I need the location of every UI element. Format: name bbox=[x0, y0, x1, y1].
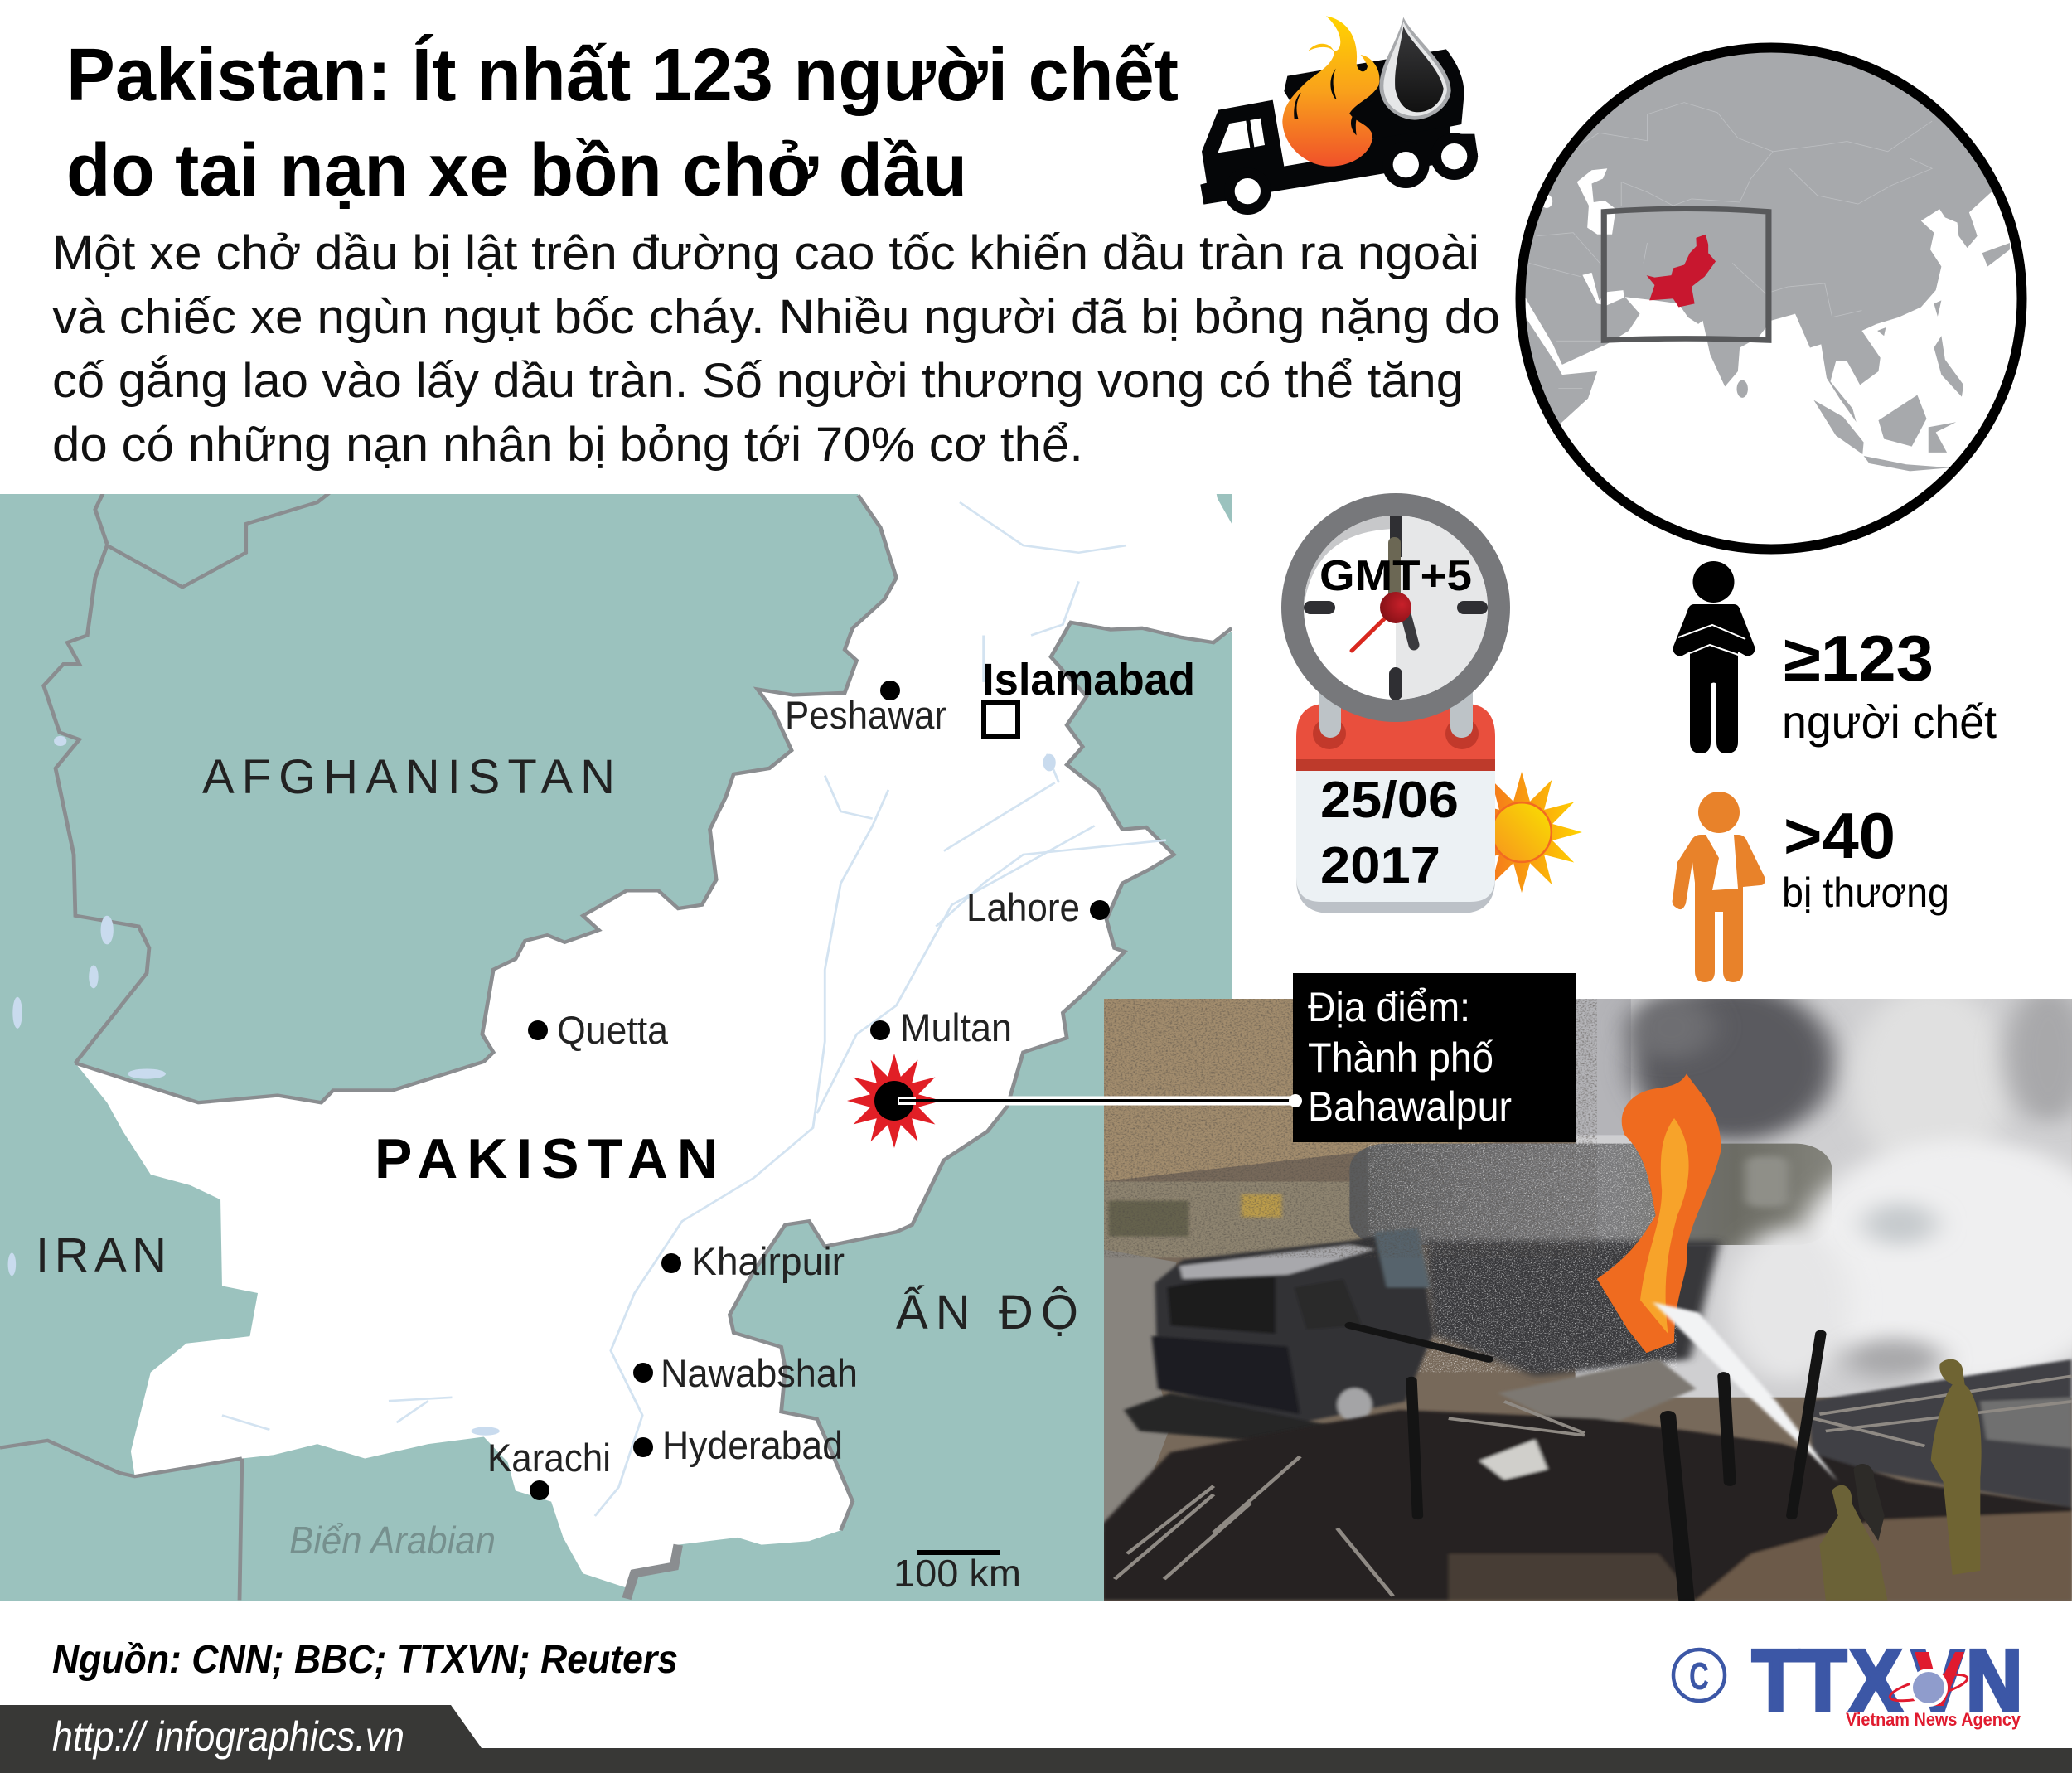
icon: person injured bbox=[1673, 792, 1765, 982]
calendar bbox=[1296, 680, 1495, 913]
sea label: Biển Arabian bbox=[289, 1519, 496, 1562]
scale bar: 100 km bbox=[893, 1552, 1021, 1595]
map panel bbox=[0, 481, 1237, 1601]
stat: injured bbox=[1782, 799, 1949, 916]
city: Islamabad capital bbox=[982, 655, 1195, 737]
footer bar bbox=[0, 1705, 2072, 1773]
copyright mark bbox=[1673, 1649, 1725, 1701]
website url: http:// infographics.vn bbox=[52, 1713, 404, 1760]
inset photo: burnt tanker fire bbox=[1102, 985, 2072, 1605]
Pakistan and northern territory land bbox=[75, 481, 1237, 1588]
rivers bbox=[222, 502, 1166, 1516]
intro paragraph: Một xe chở dầu bị lật trên đường cao tốc khiến dầu tràn ra ngoài bbox=[52, 226, 1479, 280]
date text bbox=[1320, 772, 1459, 894]
city: Hyderabad: Hyderabad bbox=[662, 1423, 843, 1467]
TTXVN logo: TTXVN bbox=[1752, 1631, 2022, 1728]
country label: India: ẤN ĐỘ bbox=[896, 1286, 1078, 1339]
city: Khairpuir: Khairpuir bbox=[691, 1239, 845, 1283]
location callout: Bahawalpur bbox=[1308, 1083, 1512, 1130]
hillside grain bbox=[1102, 995, 1597, 1257]
stat: deaths bbox=[1782, 622, 1997, 748]
country label: Pakistan: PAKISTAN bbox=[375, 1127, 718, 1190]
icon: burning oil tanker truck bbox=[1200, 16, 1478, 215]
intro paragraph: do có những nạn nhân bị bỏng tới 70% cơ thể. bbox=[52, 418, 1083, 472]
firefighters bbox=[1931, 1359, 1982, 1575]
intro paragraph: và chiếc xe ngùn ngụt bốc cháy. Nhiều người đã bị bỏng nặng do bbox=[52, 290, 1500, 344]
location callout bbox=[1289, 973, 1576, 1142]
clock bbox=[1281, 493, 1510, 722]
TTXVN logo: Vietnam News Agency bbox=[1846, 1709, 2021, 1730]
explosion marker bbox=[847, 1054, 949, 1148]
speckled water spray bbox=[1368, 1144, 1677, 1372]
tanker bbox=[1349, 1144, 1832, 1245]
country label: Iran: IRAN bbox=[36, 1228, 167, 1282]
background smoke bbox=[1576, 995, 2072, 1398]
intro paragraph bbox=[52, 226, 1500, 472]
title bbox=[66, 33, 1179, 212]
city: Multan: Multan bbox=[900, 1005, 1012, 1049]
time zone text: GMT+5 bbox=[1319, 552, 1472, 600]
city: Karachi bbox=[487, 1436, 611, 1500]
poles bbox=[1349, 1325, 1821, 1601]
intro paragraph: cố gắng lao vào lấy dầu tràn. Số người thương vong có thể tăng bbox=[52, 354, 1464, 408]
location callout: Địa điểm: bbox=[1308, 984, 1470, 1030]
country label: Afghanistan: AFGHANISTAN bbox=[202, 750, 615, 804]
city: Peshawar: Peshawar bbox=[785, 693, 946, 737]
rods and ground bbox=[1102, 1359, 2072, 1601]
hillside bbox=[1104, 999, 1496, 1182]
copyright mark: C bbox=[1689, 1654, 1709, 1698]
icon: sun bbox=[1461, 772, 1582, 893]
stat: deaths: ≥123 bbox=[1784, 622, 1934, 695]
white steam bbox=[1795, 1139, 2072, 1384]
stat: injured: >40 bbox=[1784, 799, 1895, 872]
date text: 2017 bbox=[1320, 837, 1440, 894]
city: Karachi: Karachi bbox=[487, 1436, 611, 1480]
title: do tai nạn xe bồn chở dầu bbox=[66, 129, 967, 212]
date text: 25/06 bbox=[1320, 772, 1459, 829]
icon: person dead bbox=[1673, 561, 1755, 753]
flame bbox=[1597, 1073, 1721, 1353]
stat: deaths: người chết bbox=[1782, 695, 1997, 748]
lakes bbox=[8, 736, 1056, 1436]
burnt cab bbox=[1124, 1228, 1433, 1444]
city: Lahore: Lahore bbox=[966, 885, 1080, 929]
callout line bbox=[899, 1096, 1300, 1106]
source line: Nguồn: CNN; BBC; TTXVN; Reuters bbox=[52, 1638, 678, 1682]
stat: injured: bị thương bbox=[1782, 870, 1949, 916]
location callout: Thành phố bbox=[1308, 1034, 1493, 1081]
water jet bbox=[1653, 1302, 1838, 1482]
city: Nawabshah: Nawabshah bbox=[661, 1351, 858, 1395]
title: Pakistan: Ít nhất 123 người chết bbox=[66, 33, 1179, 117]
city: Quetta: Quetta bbox=[557, 1008, 669, 1052]
locator globe bbox=[1515, 43, 2027, 554]
country borders bbox=[0, 493, 1232, 1600]
city: Islamabad capital: Islamabad bbox=[982, 655, 1195, 705]
map labels bbox=[36, 750, 1078, 1562]
